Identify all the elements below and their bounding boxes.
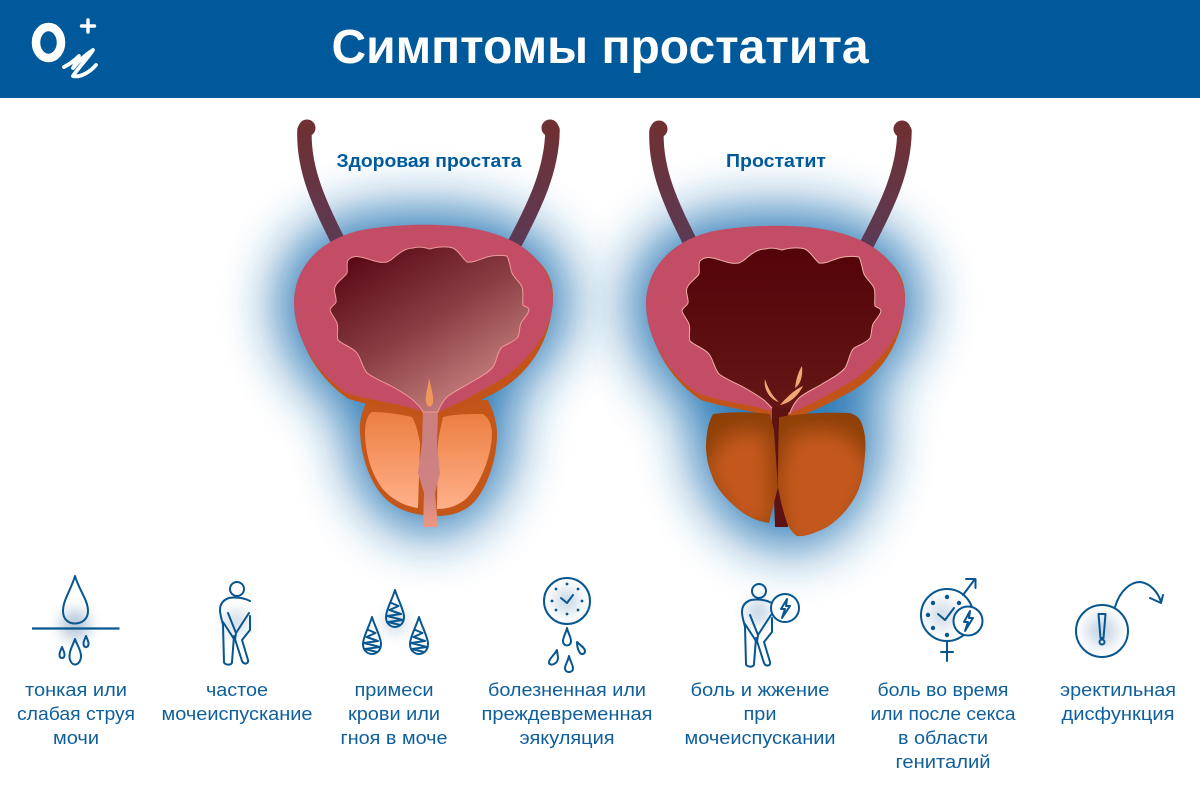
label: эякуляция xyxy=(520,727,614,748)
blue glow xyxy=(294,225,553,518)
label: или после секса xyxy=(870,703,1016,724)
label: дисфункция xyxy=(1062,703,1174,724)
label: примеси xyxy=(354,679,434,700)
label: гноя в моче xyxy=(340,727,448,748)
orange flame xyxy=(426,378,433,406)
label: эректильная xyxy=(1060,679,1176,700)
right lobe xyxy=(778,412,866,536)
label: преждевременная xyxy=(482,703,652,724)
heading: prostatitis: Простатит xyxy=(726,151,826,171)
diagram: prostatitis xyxy=(646,120,910,550)
stones xyxy=(765,366,803,405)
label: боль во время xyxy=(878,679,1008,700)
label: мочеиспускании xyxy=(684,727,836,748)
central duct xyxy=(772,408,790,527)
label: мочи xyxy=(53,727,99,748)
label: слабая струя xyxy=(17,703,135,724)
left lobe xyxy=(705,412,778,530)
label: болезненная или xyxy=(488,679,646,700)
label: боль и жжение xyxy=(690,679,830,700)
icon: person xyxy=(220,582,250,665)
icon: water drops xyxy=(32,576,120,664)
ducts xyxy=(650,120,910,244)
label: крови или xyxy=(348,703,440,724)
heading: healthy prostate: Здоровая простата xyxy=(336,151,523,171)
label: в области xyxy=(898,727,988,748)
symptom 2: frequent urination xyxy=(162,582,312,724)
label: гениталий xyxy=(896,751,990,772)
urethra xyxy=(418,410,440,527)
prostate capsule xyxy=(360,400,497,516)
symptom 5: burning pain during urination xyxy=(684,584,836,748)
label: тонкая или xyxy=(25,679,127,700)
symptom 3: blood or pus in urine xyxy=(340,590,448,748)
icon: clock with drops xyxy=(544,578,590,672)
diagram: healthy prostate xyxy=(294,120,558,527)
header band xyxy=(0,0,1200,98)
ducts xyxy=(298,120,558,243)
bladder cavity xyxy=(330,247,529,412)
label: при xyxy=(744,703,776,724)
symptom 4: painful or premature ejaculation xyxy=(482,578,652,748)
label: частое xyxy=(206,679,268,700)
prostate lobes xyxy=(365,412,492,509)
bladder wall xyxy=(296,231,553,418)
icon: clock with gender symbols xyxy=(921,579,982,661)
blue glow xyxy=(646,226,905,532)
icon: striped drops xyxy=(363,590,428,654)
logo xyxy=(36,20,96,76)
symptom 7: erectile dysfunction xyxy=(1060,582,1176,724)
symptom 6: pain during or after sex xyxy=(870,579,1016,772)
label: мочеиспускание xyxy=(162,703,312,724)
icon: person with lightning xyxy=(742,584,799,667)
bladder wall xyxy=(646,226,905,419)
symptom 1: thin stream xyxy=(17,576,135,748)
icon: exclamation circle with arrow xyxy=(1076,582,1163,657)
title: Симптомы простатита xyxy=(332,21,869,74)
